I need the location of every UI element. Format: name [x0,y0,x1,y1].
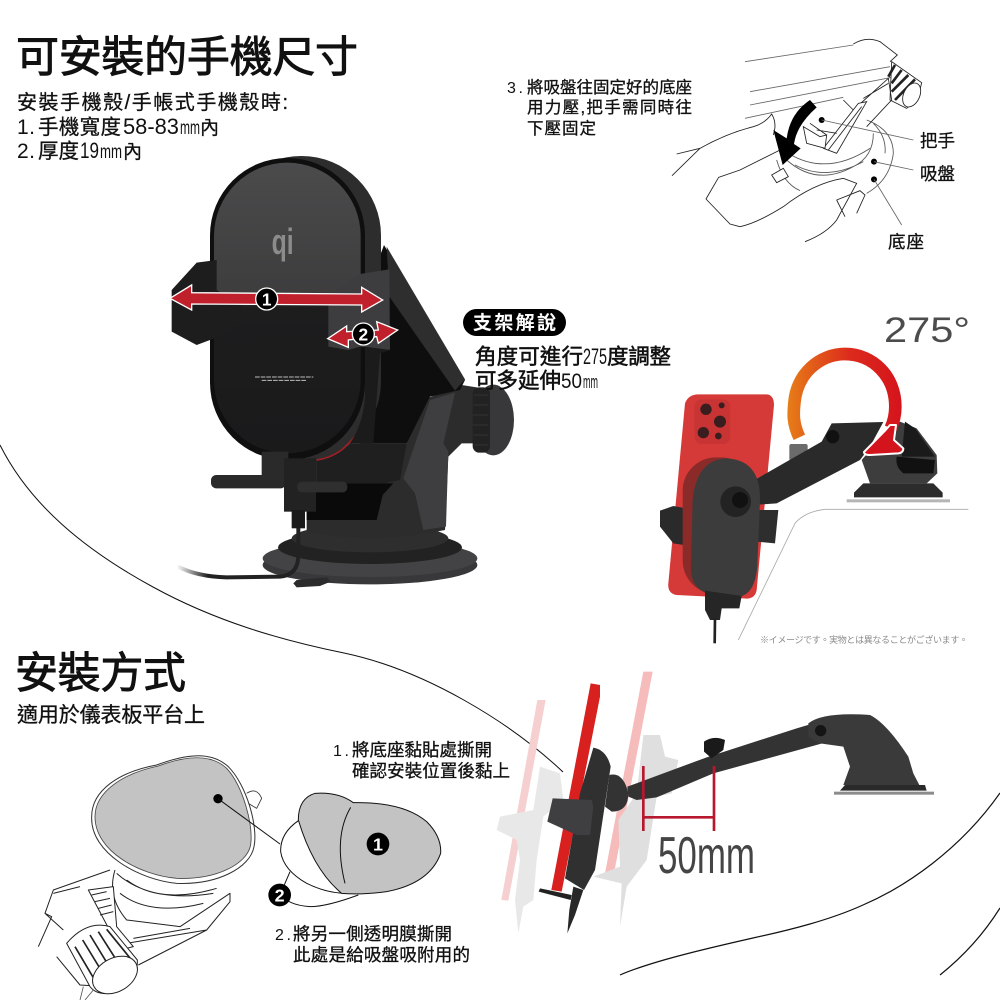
lower hand [706,148,783,227]
heading: installation method: 安裝方式 [15,650,186,698]
upper bracket block [317,443,407,483]
arm bracket [843,78,892,127]
ghost holder left [497,767,563,933]
leader: suction cup [871,159,913,170]
cable [711,618,719,643]
subheading: suitable for dashboard: 適用於儀表板平台上 [17,704,205,727]
text block: phone case requirements: 1. [17,116,35,139]
bottom support tab right [297,482,347,492]
ghost phone right [605,672,653,873]
holder face inner [214,163,361,453]
thumb hand [740,178,865,242]
mount head and knob [853,39,924,110]
text block: phone case requirements: 58-83 [123,114,179,139]
step 3 text [507,78,692,138]
step 3 text: 下壓固定 [527,119,596,138]
ball joint [720,486,751,517]
charger body [691,458,760,597]
step 3 text: 用力壓,把手需同時往 [527,98,692,117]
column body [307,385,493,538]
step 1 text: 1. [333,743,349,760]
dark cavity behind connector [307,483,393,520]
red rotation arrow [794,354,903,455]
tilt arm [350,245,465,443]
text block: stand adjustment: 度調整 [607,345,671,369]
left clamp [172,260,242,345]
leader line to pad [213,794,280,844]
phone holder [565,748,611,890]
fold line on pad [340,807,351,883]
badge: stand explanation: 支架解說 [473,312,556,334]
text block: phone case requirements: 內 [123,142,142,163]
arrow 1: phone width [170,285,383,312]
leader: handle [819,117,913,140]
text block: phone case requirements: 內 [200,118,219,139]
label: 50mm: 50mm [658,827,755,885]
step 3 text: 3. [507,80,523,97]
step 1 text: 將底座黏貼處撕開 [352,740,492,760]
step 2 text [275,924,470,965]
suction base [808,714,934,795]
icon: curved black direction arrow [773,100,817,165]
step 2 text: 此處是給吸盤吸附用的 [293,945,470,965]
connector block [284,458,316,512]
right clamp [328,269,390,350]
red accent line [317,396,373,460]
text block: stand adjustment: 50 [561,370,582,393]
suction base [263,524,477,584]
holder base tab [539,888,572,900]
back rim of holder [222,156,381,461]
mount base [847,422,950,502]
lower clamp side [350,347,390,443]
holder face [210,158,365,460]
small printed label on holder [255,377,313,380]
side clamp left [660,506,695,546]
badge 2 [268,884,291,906]
charging cable [177,512,298,577]
bottom mount bracket [262,452,288,477]
text block: phone case requirements: 19 [80,138,99,163]
title: phone size: 可安裝的手機尺寸 [16,34,358,82]
arrow 2: phone thickness: 2 [359,324,368,344]
background curve: lower right corner [940,908,1000,975]
cables under knob [80,987,93,1000]
latch details [803,123,837,148]
ghost holder right [593,735,678,927]
badge 1 [367,833,389,855]
connector neck [292,510,305,528]
step 1 text [333,740,510,781]
disclaimer note: ※イメージです。実物とは異なることがございます。 [760,634,968,645]
text block: phone case requirements: 安裝手機殼/手帳式手機殼時: [17,91,288,114]
dashboard lines [745,45,892,118]
illustration: pressing the handle on the suction base [672,39,924,242]
step 2 text: 將另一側透明膜撕開 [293,924,452,944]
knob [67,925,144,1000]
knob [704,738,725,758]
clip behind suction pad [247,791,262,808]
text block: phone case requirements: 厚度 [38,140,79,163]
label: handle: 把手 [920,131,955,151]
table outline [738,509,968,640]
knob behind arm [789,444,808,461]
arm joint bolt [826,430,839,443]
red phone [668,394,774,599]
background curve: upper section divider [0,445,563,772]
text block: stand adjustment: 可多延伸 [475,369,561,393]
arrow 1: phone width: 1 [262,289,272,309]
icon: qi logo: qi [272,221,294,262]
suction cup rings [777,120,893,193]
main red phone [551,683,600,892]
step 1 text: 確認安裝位置後黏上 [352,761,510,781]
camera module [694,399,730,444]
text block: stand adjustment: 角度可進行 [475,345,583,369]
label: base: 底座 [888,232,924,252]
illustration: phone on mount with rotation arrow [660,354,968,643]
illustration: suction mount with adhesive pad [38,756,441,1000]
suction neck rings [117,873,217,908]
cable clip [293,577,331,587]
product: wireless charging car mount with size arrows [170,156,514,587]
ribbed lines [92,892,113,915]
text block: stand adjustment: mm [583,372,598,392]
connector and cable [567,887,583,933]
text block: stand adjustment [475,344,671,393]
label: 275 degrees: 275° [884,311,970,350]
text block: phone case requirements: 2. [17,140,35,163]
background curve: lower section divider [620,793,1000,975]
suction pad rim [92,756,255,883]
ribbed slide [88,887,133,950]
arrow 2: phone thickness [328,322,398,347]
arm highlight face [387,247,465,391]
badge 1: 1 [373,835,383,855]
side clamp [547,798,593,835]
dimension bracket [643,766,714,831]
leader: base [871,176,902,225]
second film sheet [281,872,358,907]
grey adhesive pad [95,758,251,878]
illustration: telescopic arm extension [497,672,934,933]
adjustment knob [473,385,514,455]
text block: phone case requirements [17,91,288,163]
text block: phone case requirements: mm [100,142,122,163]
text block: phone case requirements: 手機寬度 [38,116,121,139]
badge: stand explanation [463,309,566,336]
bottom support tab left [211,475,286,488]
telescopic arm [740,422,883,505]
ghost phone left [501,700,546,901]
connector [705,591,742,620]
mount arm and body lines [38,870,230,987]
step 3 text: 將吸盤往固定好的底座 [527,78,692,97]
upper hand [672,114,775,176]
text block: phone case requirements: mm [180,118,200,139]
telescopic arm [627,723,825,800]
grey pad with tab [298,793,441,894]
charger ring on phone [683,457,754,594]
bolt on base [772,168,788,183]
text block: stand adjustment: 275 [583,344,607,369]
label: suction cup: 吸盤 [920,164,955,184]
side clamp right [757,510,778,543]
release film outline [281,821,347,893]
handle lever [823,102,867,153]
step 2 text: 2. [275,927,291,944]
ball joint [605,775,628,812]
badge 2: 2 [275,886,285,906]
lit column facet [403,393,455,530]
